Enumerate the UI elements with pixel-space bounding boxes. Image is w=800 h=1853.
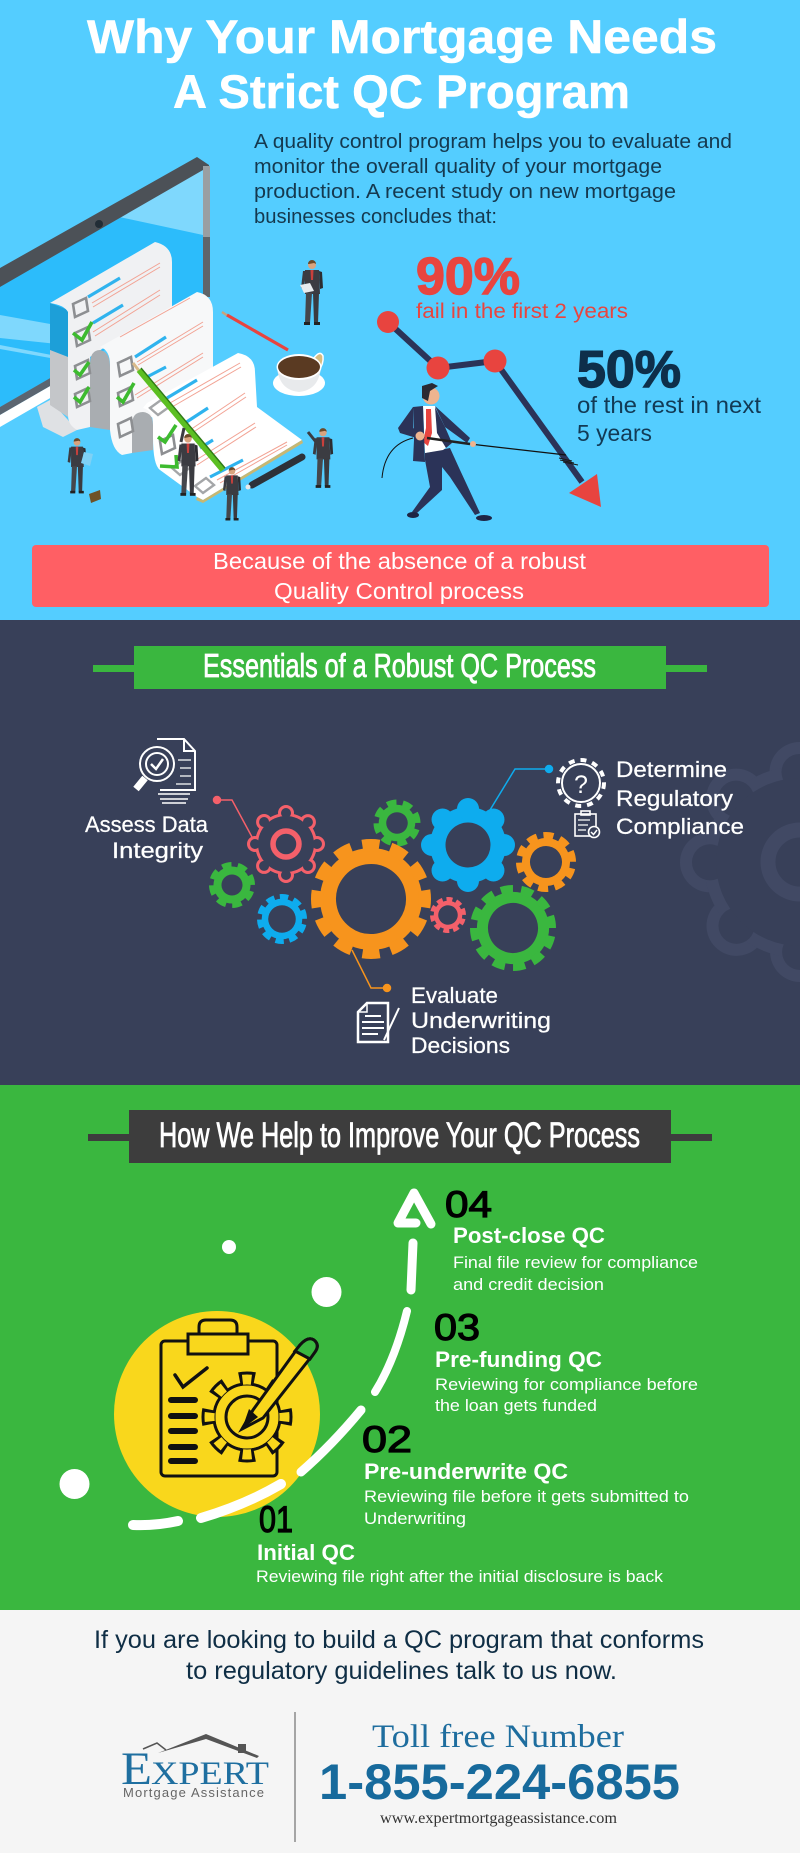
stat: 50 percent: of the rest in next — [577, 392, 762, 418]
checkboxes — [73, 298, 88, 317]
stat: 90 percent: 90% — [416, 248, 520, 306]
monitor — [0, 157, 210, 437]
pen — [246, 457, 302, 490]
icon: clipboard with gear and pencil — [161, 1320, 317, 1476]
step 02: Underwriting — [364, 1509, 466, 1528]
call to action text: If you are looking to build a QC program that conforms — [94, 1626, 704, 1654]
intro paragraph: businesses concludes that: — [254, 205, 497, 228]
logo: expert mortgage assistance: E — [121, 1743, 152, 1795]
panel: how we help to improve your QC process — [0, 1085, 800, 1610]
coffee cup — [273, 353, 325, 396]
label: assess data integrity — [85, 812, 209, 863]
panel: footer call to action — [0, 1610, 800, 1853]
red outline gear — [255, 813, 317, 875]
step 04: Final file review for compliance — [453, 1253, 698, 1272]
toll free number — [319, 1719, 680, 1827]
panel: essentials of a robust QC process — [0, 620, 800, 1085]
logo: expert mortgage assistance: Mortgage Assistance — [123, 1785, 264, 1800]
step 02: Pre-underwrite QC — [364, 1459, 568, 1484]
heading — [93, 646, 707, 689]
stat: 90 percent: fail in the first 2 years — [416, 300, 628, 323]
green top gear — [371, 797, 423, 849]
step 02: 02 — [362, 1419, 412, 1460]
step 03: Reviewing for compliance before — [435, 1375, 698, 1394]
icon: signed document — [358, 1003, 399, 1042]
stat: 90 percent — [416, 248, 628, 323]
divider — [294, 1712, 296, 1842]
logo: expert mortgage assistance — [121, 1734, 269, 1800]
logo: expert mortgage assistance: XPERT — [151, 1756, 269, 1792]
paper lines — [88, 278, 243, 477]
toll free number: www.expertmortgageassistance.com — [380, 1810, 617, 1827]
intro paragraph — [254, 130, 732, 228]
label: assess data integrity: Integrity — [112, 838, 203, 863]
call to action text: to regulatory guidelines talk to us now. — [186, 1657, 617, 1685]
icon: regulatory gear and clipboard: ? — [574, 771, 588, 799]
call to action text — [94, 1626, 704, 1685]
step 02: Reviewing file before it gets submitted to — [364, 1487, 689, 1506]
step 03 — [434, 1307, 698, 1415]
dashed path arrow — [133, 1193, 431, 1525]
step 04: 04 — [445, 1184, 492, 1225]
decorative dots — [60, 1240, 342, 1499]
stat: 50 percent: 5 years — [577, 420, 652, 446]
checklist papers — [50, 242, 303, 503]
intro paragraph: A quality control program helps you to evaluate and — [254, 130, 732, 153]
step 03: the loan gets funded — [435, 1396, 597, 1415]
label: determine regulatory compliance: Determine — [616, 757, 727, 782]
gear cluster — [206, 797, 580, 977]
step 04 — [445, 1184, 698, 1294]
label: assess data integrity: Assess Data — [85, 812, 209, 837]
label: determine regulatory compliance: Compliance — [616, 814, 744, 839]
label: determine regulatory compliance — [616, 757, 744, 839]
yellow circle — [114, 1311, 320, 1517]
step 01: 01 — [259, 1499, 293, 1540]
heading — [88, 1110, 712, 1163]
panel: why your mortgage needs QC — [0, 0, 800, 620]
step 04: and credit decision — [453, 1275, 604, 1294]
orange right gear — [512, 828, 580, 896]
intro paragraph: monitor the overall quality of your mortgage — [254, 155, 662, 178]
red pencil — [222, 312, 288, 350]
label: evaluate underwriting decisions — [411, 983, 551, 1058]
businessman pulling rope — [382, 383, 566, 521]
falling chart with arrow — [377, 311, 601, 507]
title: Why Your Mortgage Needs — [87, 10, 717, 63]
red small gear — [428, 895, 468, 935]
step 03: Pre-funding QC — [435, 1347, 602, 1372]
step 04: Post-close QC — [453, 1223, 605, 1248]
callout: absence of QC process: Quality Control process — [274, 578, 524, 604]
connector: orange — [352, 950, 390, 992]
stat: 50 percent: 50% — [577, 341, 681, 399]
background gear — [704, 766, 800, 958]
toll free number: Toll free Number — [372, 1719, 624, 1755]
label: evaluate underwriting decisions: Evaluate — [411, 983, 498, 1008]
step 01 — [256, 1499, 664, 1586]
connector: blue — [490, 766, 552, 810]
toll free number: 1-855-224-6855 — [319, 1754, 680, 1810]
green left gear — [206, 859, 258, 911]
callout: absence of QC process: Because of the absence of a robust — [213, 548, 587, 574]
icon: magnifier on document — [136, 739, 195, 803]
title: A Strict QC Program — [173, 65, 630, 118]
illustration: monitor with checklists — [0, 157, 333, 520]
step 01: Initial QC — [257, 1540, 355, 1565]
step 03: 03 — [434, 1307, 480, 1348]
step 01: Reviewing file right after the initial disclosure is back — [256, 1567, 664, 1586]
orange large gear — [309, 837, 433, 961]
title — [87, 10, 717, 118]
connector: red — [214, 796, 252, 837]
green large gear — [464, 879, 562, 977]
callout: absence of QC process — [32, 545, 769, 607]
stat: 50 percent — [577, 341, 762, 446]
label: evaluate underwriting decisions: Decisions — [411, 1033, 510, 1058]
check marks — [73, 322, 177, 467]
blue small gear — [254, 891, 310, 947]
people — [68, 260, 333, 520]
label: determine regulatory compliance: Regulatory — [616, 786, 733, 811]
label: evaluate underwriting decisions: Underwriting — [411, 1008, 551, 1033]
heading: Essentials of a Robust QC Process — [203, 647, 596, 684]
green pencil — [133, 363, 225, 470]
blue large gear — [430, 807, 506, 883]
intro paragraph: production. A recent study on new mortgage — [254, 180, 676, 203]
icon: regulatory gear and clipboard — [558, 760, 604, 838]
step 02 — [362, 1419, 689, 1528]
